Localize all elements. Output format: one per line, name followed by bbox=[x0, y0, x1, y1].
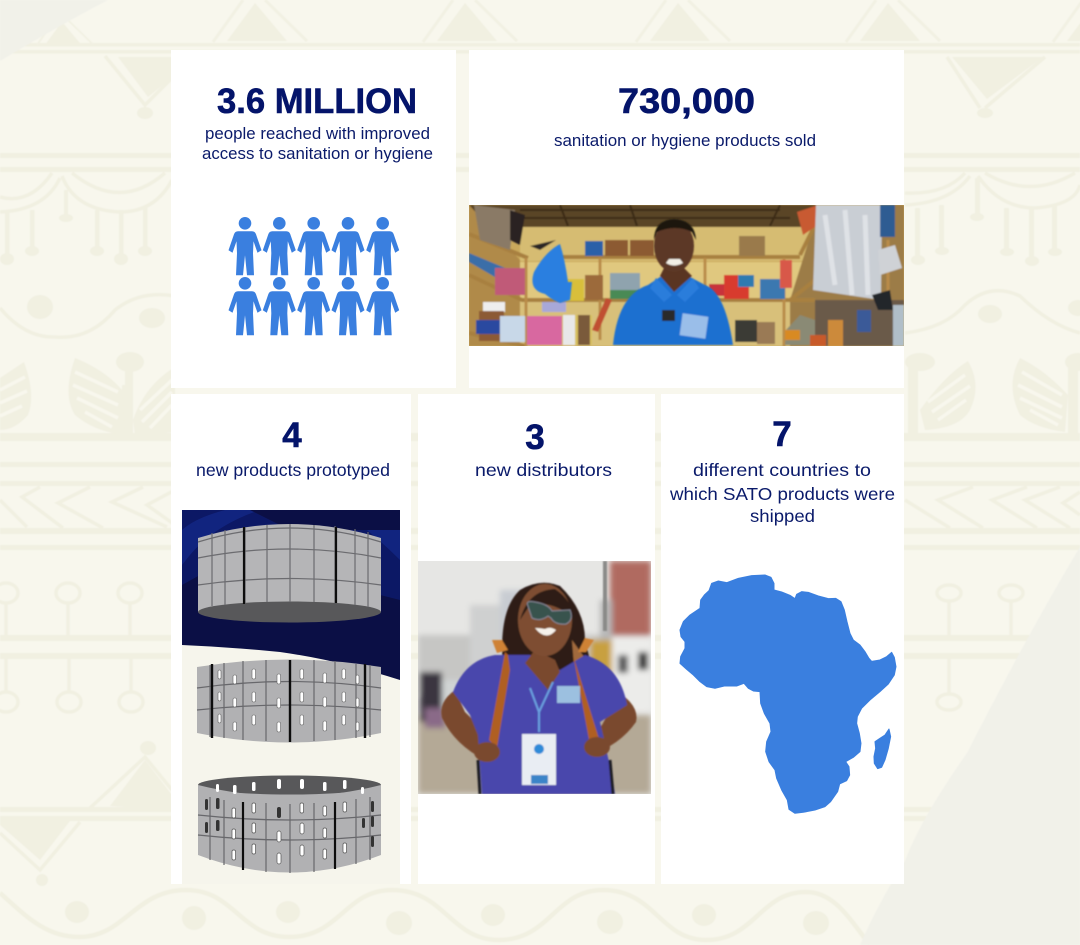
lanyard and id badge bbox=[530, 682, 553, 732]
text: different countries: shipped bbox=[750, 506, 815, 526]
text: new products prototyped: new products prototyped bbox=[196, 460, 390, 480]
text: products sold: sanitation or hygiene products sold bbox=[554, 132, 816, 150]
text: people reached bbox=[202, 125, 433, 163]
bag straps bbox=[478, 760, 613, 794]
hair bbox=[502, 583, 592, 680]
heading: 3: 3 bbox=[525, 418, 545, 457]
heading: 4: 4 bbox=[282, 416, 302, 455]
sunglasses bbox=[527, 602, 571, 624]
cylinder 1: solid bbox=[198, 524, 381, 622]
arms bbox=[440, 691, 480, 754]
shopkeeper bbox=[613, 219, 733, 345]
panel: prototyped products bbox=[171, 394, 411, 884]
cylinder 3: open top bbox=[198, 776, 381, 873]
text: people reached: access to sanitation or hygiene bbox=[202, 145, 433, 163]
cylinder 2: slotted bbox=[197, 660, 381, 742]
panel: people reached bbox=[171, 50, 456, 388]
map: Africa bbox=[680, 575, 896, 813]
blue urinal product bbox=[532, 244, 572, 303]
text: new distributors: new distributors bbox=[475, 460, 612, 480]
image: three cylinder prototypes bbox=[182, 510, 400, 884]
text: different countries: which SATO products were bbox=[669, 484, 895, 504]
heading: 7: 7 bbox=[772, 415, 792, 454]
photo: shopkeeper in his shop bbox=[469, 205, 904, 346]
panel: products sold bbox=[469, 50, 904, 388]
heading: 730,000: 730,000 bbox=[618, 82, 755, 121]
neck and face bbox=[518, 584, 572, 656]
photo: smiling distributor bbox=[418, 561, 651, 794]
leaf ribs bbox=[0, 372, 1062, 428]
text: people reached: people reached with improved bbox=[205, 125, 430, 143]
panel: new distributors bbox=[418, 394, 655, 884]
heading: 3.6 million: 3.6 MILLION bbox=[217, 82, 417, 121]
corner shades bbox=[0, 0, 108, 61]
orange straps bbox=[489, 652, 510, 748]
hands bbox=[474, 742, 500, 762]
shirt bbox=[453, 655, 627, 794]
text: different countries bbox=[669, 460, 895, 526]
panel: countries shipped bbox=[661, 394, 904, 884]
text: different countries: different countries to bbox=[693, 460, 871, 480]
icon: ten people bbox=[228, 217, 399, 335]
shirt logo bbox=[557, 686, 580, 703]
